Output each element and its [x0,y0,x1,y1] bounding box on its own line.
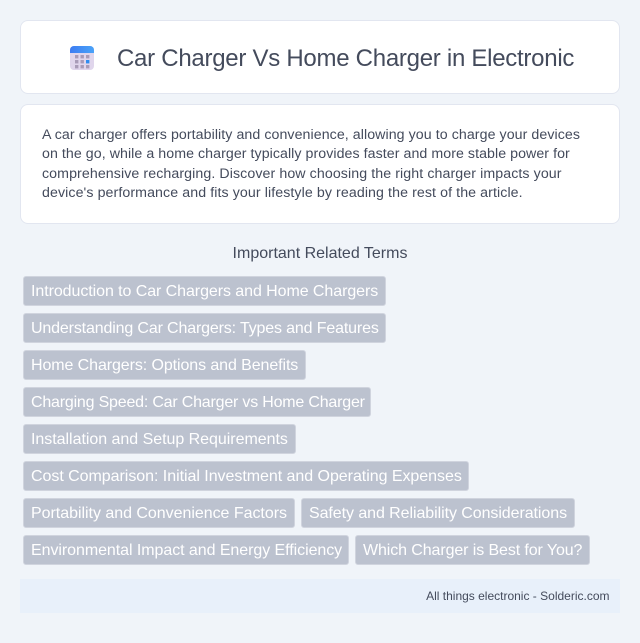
related terms tag list [23,276,590,565]
tag [301,498,575,528]
tag [23,498,295,528]
tag [23,461,469,491]
tag: Home Chargers: Options and Benefits [31,357,298,374]
tag [23,313,386,343]
tag [23,424,296,454]
tag: Installation and Setup Requirements [31,431,288,448]
tag: Cost Comparison: Initial Investment and Operating Expenses [31,468,462,485]
tag [23,535,349,565]
tag: Charging Speed: Car Charger vs Home Charger [31,394,365,411]
heading: important related terms: Important Related Terms [233,245,407,262]
title: Car Charger Vs Home Charger in Electronic [117,45,574,72]
tag [23,350,306,380]
footer bar [20,579,620,613]
intro paragraph: comprehensive recharging. Discover how choosing the right charger impacts your [42,166,562,182]
header panel [20,20,620,94]
tag [23,276,386,306]
tag [355,535,590,565]
tag: Introduction to Car Chargers and Home Chargers [31,283,378,300]
intro paragraph [42,127,580,201]
tag: Portability and Convenience Factors [31,505,287,522]
intro paragraph: A car charger offers portability and convenience, allowing you to charge your devices [42,127,580,143]
intro text panel [20,104,620,224]
intro paragraph: device's performance and fits your lifestyle by reading the rest of the article. [42,185,523,201]
footer text: All things electronic - Solderic.com [426,589,610,603]
tag [23,387,371,417]
tag: Safety and Reliability Considerations [309,505,567,522]
tag: Understanding Car Chargers: Types and Features [31,320,379,337]
icon: calendar [70,46,94,70]
tag: Which Charger is Best for You? [363,542,582,559]
intro paragraph: on the go, while a home charger typically provides faster and more stable power for [42,146,570,162]
tag: Environmental Impact and Energy Efficiency [31,542,342,559]
